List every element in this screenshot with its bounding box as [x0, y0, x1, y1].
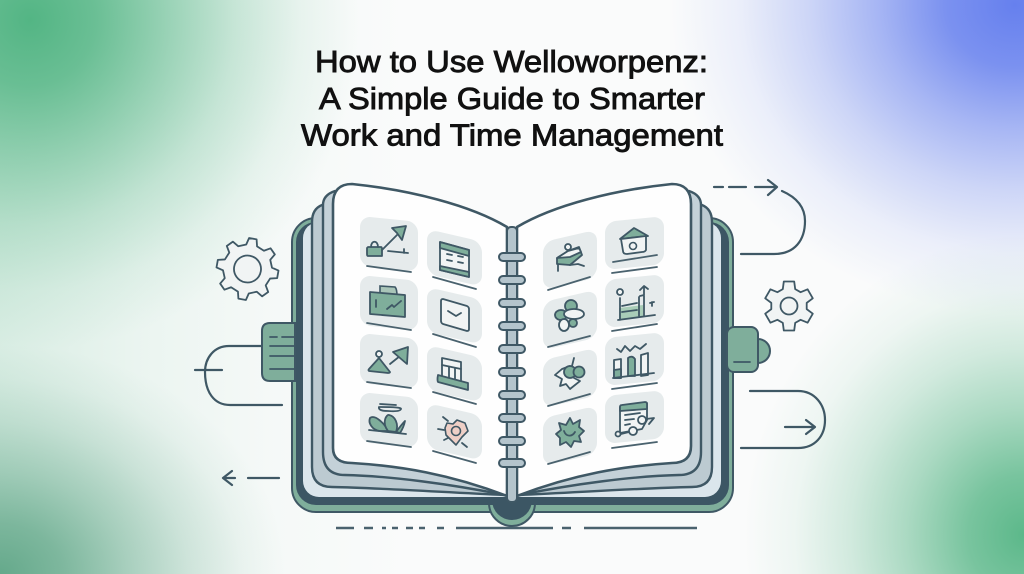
left tab	[262, 323, 295, 381]
icon: right gear	[765, 282, 813, 330]
arrow: lower left arrow	[223, 471, 279, 485]
right page stack	[519, 191, 712, 495]
title	[301, 44, 723, 152]
right page	[517, 184, 691, 496]
icon tile: building	[427, 345, 482, 404]
icon tile: browser window	[427, 229, 482, 289]
bottom dashed line	[336, 527, 697, 529]
icon tile: box with coin	[543, 230, 597, 290]
arrow: left loop connector	[195, 346, 282, 405]
icon tile: document and chat	[605, 390, 664, 448]
arrow: upper right dashed loop	[714, 180, 805, 254]
title: A Simple Guide to Smarter	[319, 81, 705, 116]
title: How to Use Welloworpenz:	[315, 44, 708, 79]
icon tile: plant leaves	[360, 392, 418, 448]
icon tile: molecule blob	[543, 348, 597, 408]
left page stack	[312, 191, 505, 495]
right tab	[727, 327, 770, 372]
icon tile: house	[605, 216, 664, 273]
icon tile: growth arrow and lock	[360, 216, 418, 272]
icon tile: bar chart	[605, 332, 664, 389]
icon tile: briefcase	[360, 275, 418, 331]
title: Work and Time Management	[301, 118, 723, 152]
spiral spine	[499, 227, 525, 502]
icon tile: heart with rays	[427, 403, 482, 463]
open notebook	[262, 184, 770, 526]
icon tile: mound and arrow	[360, 333, 418, 389]
book cover	[292, 218, 733, 526]
left page	[333, 184, 507, 496]
icon: left gear	[212, 233, 283, 305]
arrow: lower right loop	[741, 391, 825, 448]
icon tile: message box	[427, 287, 482, 347]
icon tile: green splat	[543, 406, 597, 466]
icon tile: site chart	[605, 274, 664, 331]
icon tile: clover	[543, 290, 597, 350]
